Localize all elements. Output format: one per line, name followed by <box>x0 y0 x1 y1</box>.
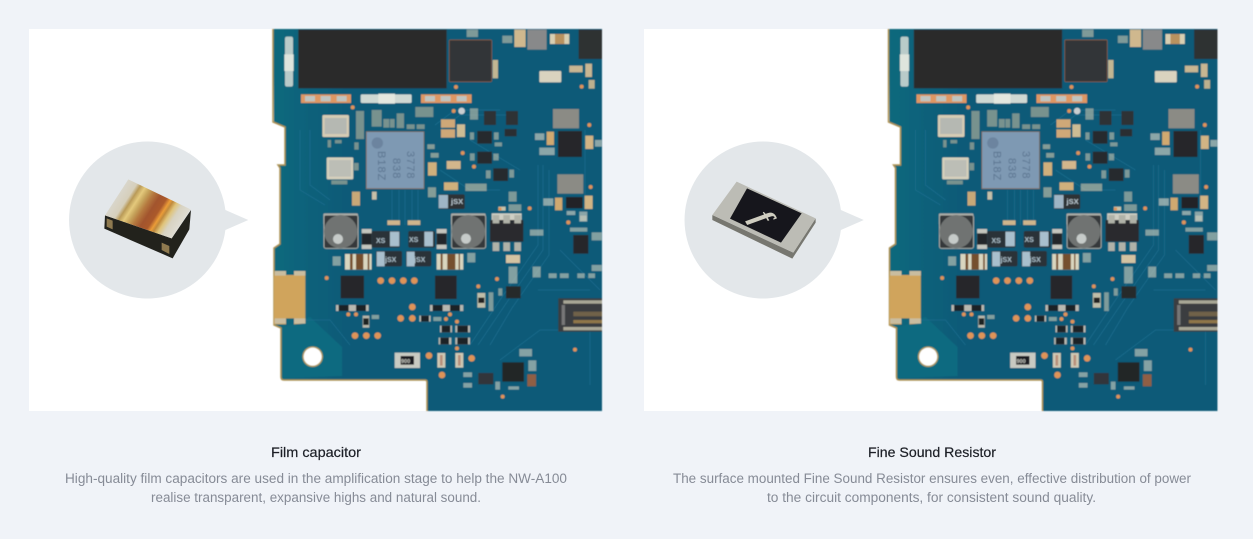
white image panel <box>29 29 602 411</box>
circuit board photo: B18Z <box>375 151 387 181</box>
text block: film capacitor description: High-quality film capacitors are used in the amplification stage to help the NW-A100 <box>65 471 567 486</box>
icon: fine sound resistor component: f <box>745 204 783 234</box>
circuit board photo: XS <box>1024 237 1034 244</box>
circuit board photo: jSX <box>450 197 463 206</box>
text block: film capacitor description: realise transparent, expansive highs and natural sound. <box>151 490 481 505</box>
panel: fine sound resistor <box>644 29 1218 411</box>
circuit board photo: XS <box>376 238 386 245</box>
circuit board photo: 3778 <box>1020 151 1032 179</box>
circuit board photo: jSX <box>413 257 426 264</box>
heading: film capacitor: Film capacitor <box>271 444 361 460</box>
circuit board photo: XS <box>992 238 1001 245</box>
circuit board photo <box>273 29 602 411</box>
circuit board photo: 900 <box>401 359 410 365</box>
text block: fine sound resistor description: The surface mounted Fine Sound Resistor ensures even, effective distribution of power <box>673 471 1191 486</box>
circuit board photo: B18Z <box>990 151 1002 181</box>
circuit board photo <box>888 29 1218 411</box>
text block: fine sound resistor description: to the circuit components, for consistent sound quality. <box>767 490 1096 505</box>
callout bubble <box>69 142 248 299</box>
text block: film capacitor description <box>65 471 567 505</box>
circuit board photo: 900 <box>1016 359 1026 365</box>
icon: fine sound resistor component <box>712 182 816 259</box>
circuit board photo: 838 <box>1006 158 1018 179</box>
callout bubble <box>685 142 864 299</box>
circuit board photo: jSX <box>384 257 397 264</box>
white image panel <box>644 29 1218 411</box>
circuit board photo: 3778 <box>404 151 416 179</box>
circuit board photo: jSX <box>1028 257 1041 264</box>
text block: fine sound resistor description <box>673 471 1191 505</box>
circuit board photo: 838 <box>390 158 402 179</box>
panel: film capacitor <box>29 29 602 411</box>
circuit board photo: jSX <box>1066 197 1079 206</box>
heading: fine sound resistor: Fine Sound Resistor <box>868 444 996 460</box>
circuit board photo: XS <box>409 237 419 244</box>
circuit board photo: jSX <box>1000 257 1012 264</box>
icon: film capacitor component <box>104 179 191 258</box>
